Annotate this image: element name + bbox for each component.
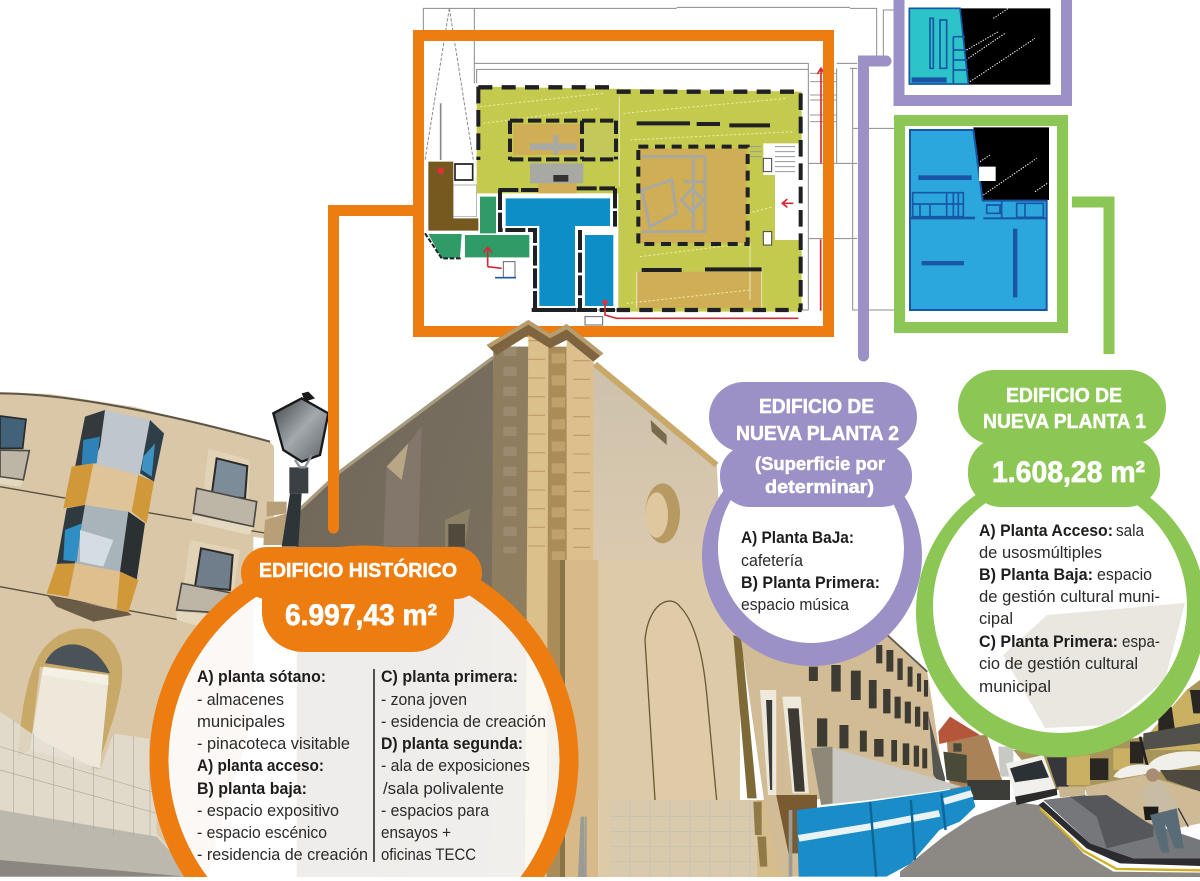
note: surface to be determined: (Superficie por bbox=[755, 454, 885, 474]
text block: left column: - pinacoteca visitable bbox=[197, 734, 350, 753]
church sunlit wall bbox=[592, 362, 722, 800]
text block: left column: A) planta acceso: bbox=[197, 756, 324, 775]
heading: EDIFICIO DE NUEVA PLANTA 2: EDIFICIO DE bbox=[759, 396, 874, 418]
photo: left building facade bbox=[0, 392, 287, 877]
blue side room bbox=[585, 235, 613, 306]
photo: church walls and tower bbox=[297, 320, 722, 877]
text block: new building 2 uses: B) Planta Primera: bbox=[741, 573, 880, 592]
panel: new building 1 bbox=[916, 370, 1200, 757]
ring: new building 1 bbox=[916, 467, 1200, 757]
panel: new building 2 bbox=[702, 382, 922, 666]
truck bbox=[1006, 755, 1057, 805]
text block: right column: - espacios para bbox=[381, 801, 490, 820]
photo: right wing of the building bbox=[735, 600, 944, 877]
upper bay window bbox=[75, 410, 164, 482]
tower quoins bbox=[490, 347, 528, 877]
circle: historic building text background bbox=[168, 564, 559, 877]
note: surface to be determined bbox=[755, 454, 885, 497]
text block: right column: C) planta primera: bbox=[381, 667, 518, 686]
text block: new building 1 uses: B) Planta Baja: bbox=[979, 565, 1093, 584]
text block: right column: oficinas TECC bbox=[381, 845, 476, 864]
connector: new building 2 bbox=[864, 61, 886, 356]
photo: street lamp bbox=[273, 392, 328, 547]
heading: EDIFICIO DE NUEVA PLANTA 1: EDIFICIO DE bbox=[1006, 385, 1122, 407]
cream wall bbox=[1085, 775, 1200, 828]
text block: new building 2 uses: espacio música bbox=[741, 595, 849, 614]
connector: new building 1 bbox=[1072, 202, 1109, 354]
text block: left column: - espacio escénico bbox=[197, 823, 327, 842]
round window bbox=[645, 483, 680, 543]
text block: new building 1 uses bbox=[979, 521, 1160, 696]
text block: new building 2 uses bbox=[741, 528, 880, 614]
frame: new building 1 plan (green) bbox=[900, 120, 1062, 328]
circle: new building 2 text background bbox=[718, 453, 904, 643]
church dark side wall bbox=[297, 358, 497, 877]
text block: left column: A) planta sótano: bbox=[197, 667, 326, 686]
sidewalk bbox=[1043, 795, 1200, 858]
heading: EDIFICIO HISTÓRICO: EDIFICIO HISTÓRICO bbox=[259, 558, 457, 582]
red house bbox=[938, 717, 1003, 790]
text block: new building 1 uses: cio de gestión cultural bbox=[979, 654, 1138, 673]
circle: new building 1 text background bbox=[932, 478, 1188, 734]
heading: EDIFICIO DE NUEVA PLANTA 1 bbox=[983, 385, 1146, 433]
ring: historic building bbox=[150, 546, 578, 877]
blue T room bbox=[506, 198, 610, 306]
heading: EDIFICIO DE NUEVA PLANTA 2 bbox=[736, 396, 899, 445]
text block: right column: /sala polivalente bbox=[383, 779, 504, 798]
text block: left column: - residencia de creación bbox=[197, 845, 368, 864]
photo: lower church wall with blind arch bbox=[560, 560, 790, 877]
text block: right column: ensayos + bbox=[381, 823, 451, 842]
heading pill: new building 1 bbox=[958, 370, 1166, 445]
heading: EDIFICIO DE NUEVA PLANTA 2: NUEVA PLANTA 2 bbox=[736, 423, 899, 445]
text block: new building 1 uses: cipal bbox=[979, 609, 1013, 628]
panel: historic building bbox=[150, 546, 578, 877]
photo: hoarding and blue fence bbox=[791, 747, 975, 877]
faint building behind text circle bbox=[1003, 603, 1185, 728]
lower bay window bbox=[57, 505, 145, 580]
area pill: new building 1 bbox=[968, 438, 1160, 507]
pedestrian bbox=[1142, 768, 1188, 853]
text block: left column: B) planta baja: bbox=[197, 779, 307, 798]
wing windows bbox=[809, 645, 928, 768]
plan: new building 2 bbox=[850, 8, 1050, 310]
text block: new building 1 uses: espacio bbox=[1097, 565, 1152, 584]
dark corner of wing bbox=[928, 715, 945, 790]
text block: new building 1 uses: de gestión cultural muni- bbox=[979, 587, 1160, 606]
area value: new building 1: 1.608,28 m² bbox=[992, 456, 1145, 489]
background yellow buildings bbox=[998, 680, 1200, 790]
area value: historic building: 6.997,43 m² bbox=[285, 599, 437, 632]
heading pill: historic building bbox=[241, 547, 482, 599]
text block: new building 1 uses: A) Planta Acceso: bbox=[979, 521, 1113, 540]
text block: left column: - almacenes bbox=[197, 690, 284, 709]
arched door bbox=[18, 628, 122, 770]
photo: street scene, truck and pedestrian bbox=[900, 680, 1200, 880]
text block: right column: D) planta segunda: bbox=[381, 734, 523, 753]
text block: right column: - zona joven bbox=[381, 690, 467, 709]
text block: new building 2 uses: A) Planta BaJa: bbox=[741, 528, 854, 547]
note: surface to be determined: determinar) bbox=[765, 477, 874, 497]
frame: new building 2 plan (purple) bbox=[899, 0, 1066, 100]
text block: new building 1 uses: de usosmúltiples bbox=[979, 543, 1102, 562]
text block: new building 1 uses: municipal bbox=[979, 677, 1051, 696]
text block: new building 1 uses: espa- bbox=[1122, 632, 1160, 651]
circle: new building 2 outer ring bbox=[702, 446, 922, 666]
note pill: new building 2 bbox=[720, 445, 912, 507]
plan: historic building floor plan bbox=[423, 7, 850, 325]
text block: left column: - espacio expositivo bbox=[197, 801, 339, 820]
heading: EDIFICIO DE NUEVA PLANTA 1: NUEVA PLANTA 1 bbox=[983, 411, 1146, 433]
construction fence bbox=[0, 712, 193, 877]
windows bbox=[0, 416, 250, 593]
road bbox=[900, 802, 1200, 880]
plan: new building 1 bbox=[910, 127, 1049, 310]
text block: new building 2 uses: cafetería bbox=[741, 551, 804, 570]
text block: new building 1 uses: C) Planta Primera: bbox=[979, 632, 1118, 651]
heading pill: new building 2 bbox=[709, 382, 917, 452]
text block: left column: municipales bbox=[197, 712, 285, 731]
text block: new building 1 uses: sala bbox=[1116, 521, 1144, 540]
text block: right column: - esidencia de creación bbox=[381, 712, 546, 731]
text block: left column bbox=[197, 667, 368, 864]
area pill: historic building bbox=[262, 590, 454, 652]
frame: historic building plan (orange) bbox=[418, 36, 828, 332]
connector: historic building bbox=[334, 210, 413, 528]
text block: right column: - ala de exposiciones bbox=[381, 756, 530, 775]
text block: right column bbox=[381, 667, 546, 864]
